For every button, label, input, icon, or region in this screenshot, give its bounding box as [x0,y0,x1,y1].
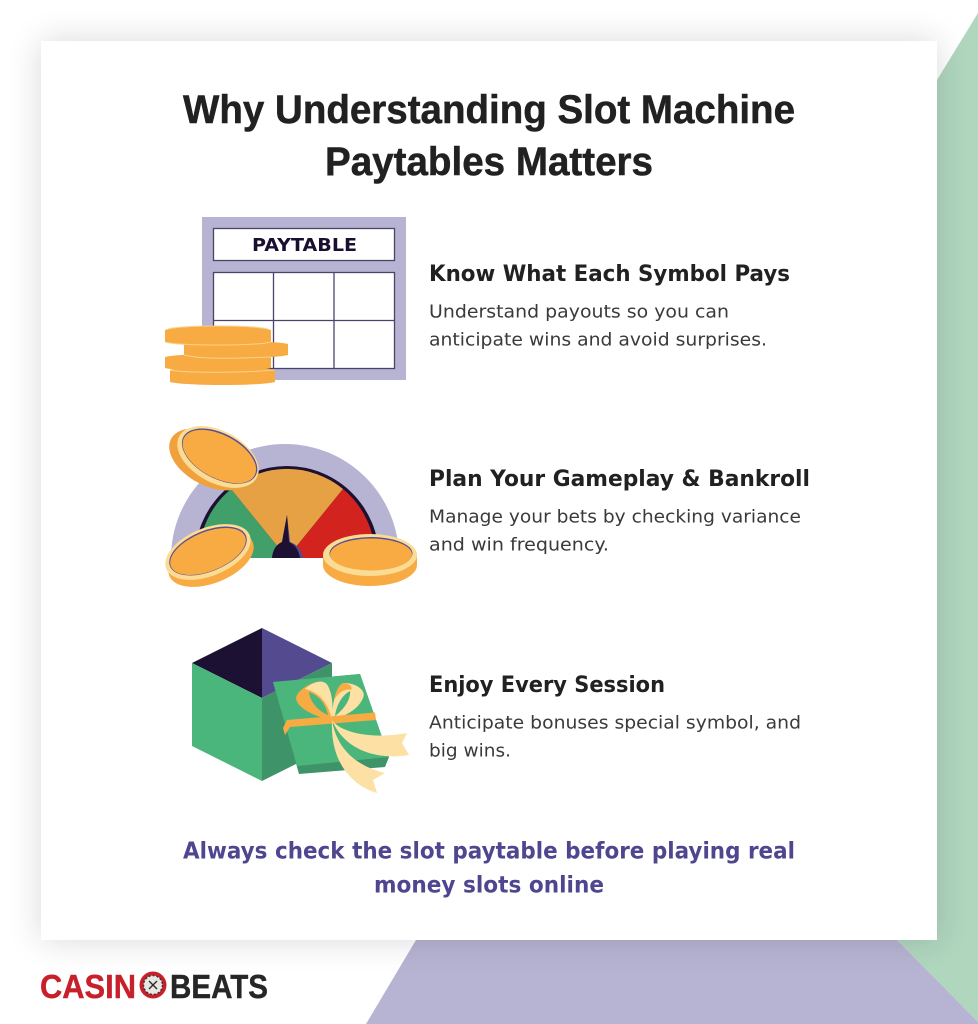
icon: gauge with coins [157,411,417,598]
heading: know what each symbol pays: Know What Each Symbol Pays [429,262,790,287]
coin right [323,534,417,586]
callout: always check the paytable: Always check the slot paytable before playing real [183,838,795,864]
text: gameplay description: Manage your bets by checking variance [429,506,801,528]
text: session description: big wins. [429,740,511,762]
logo: CasinoBeats: BEATS [170,968,268,1005]
icon: paytable with coin stack [165,217,406,385]
title [183,88,795,184]
icon: paytable with coin stack: PAYTABLE [252,236,357,256]
callout: always check the paytable [183,838,795,898]
coin top left [159,411,269,506]
coin bottom left [157,513,262,598]
text: symbol pays description: anticipate wins and avoid surprises. [429,330,767,350]
title: Paytables Matters [325,140,653,184]
logo: CasinoBeats [40,968,268,1005]
text: session description [429,712,801,762]
heading: enjoy every session: Enjoy Every Session [429,673,665,698]
text: symbol pays description [429,302,767,350]
heading: plan your gameplay and bankroll: Plan Your Gameplay & Bankroll [429,467,810,492]
icon: open gift box [192,628,409,793]
text: session description: Anticipate bonuses special symbol, and [429,712,801,734]
callout: always check the paytable: money slots online [374,872,604,898]
logo: CasinoBeats: CASIN [40,968,136,1005]
text: symbol pays description: Understand payouts so you can [429,302,729,322]
text: gameplay description: and win frequency. [429,534,609,556]
title: Why Understanding Slot Machine [183,88,795,132]
text: gameplay description [429,506,801,556]
